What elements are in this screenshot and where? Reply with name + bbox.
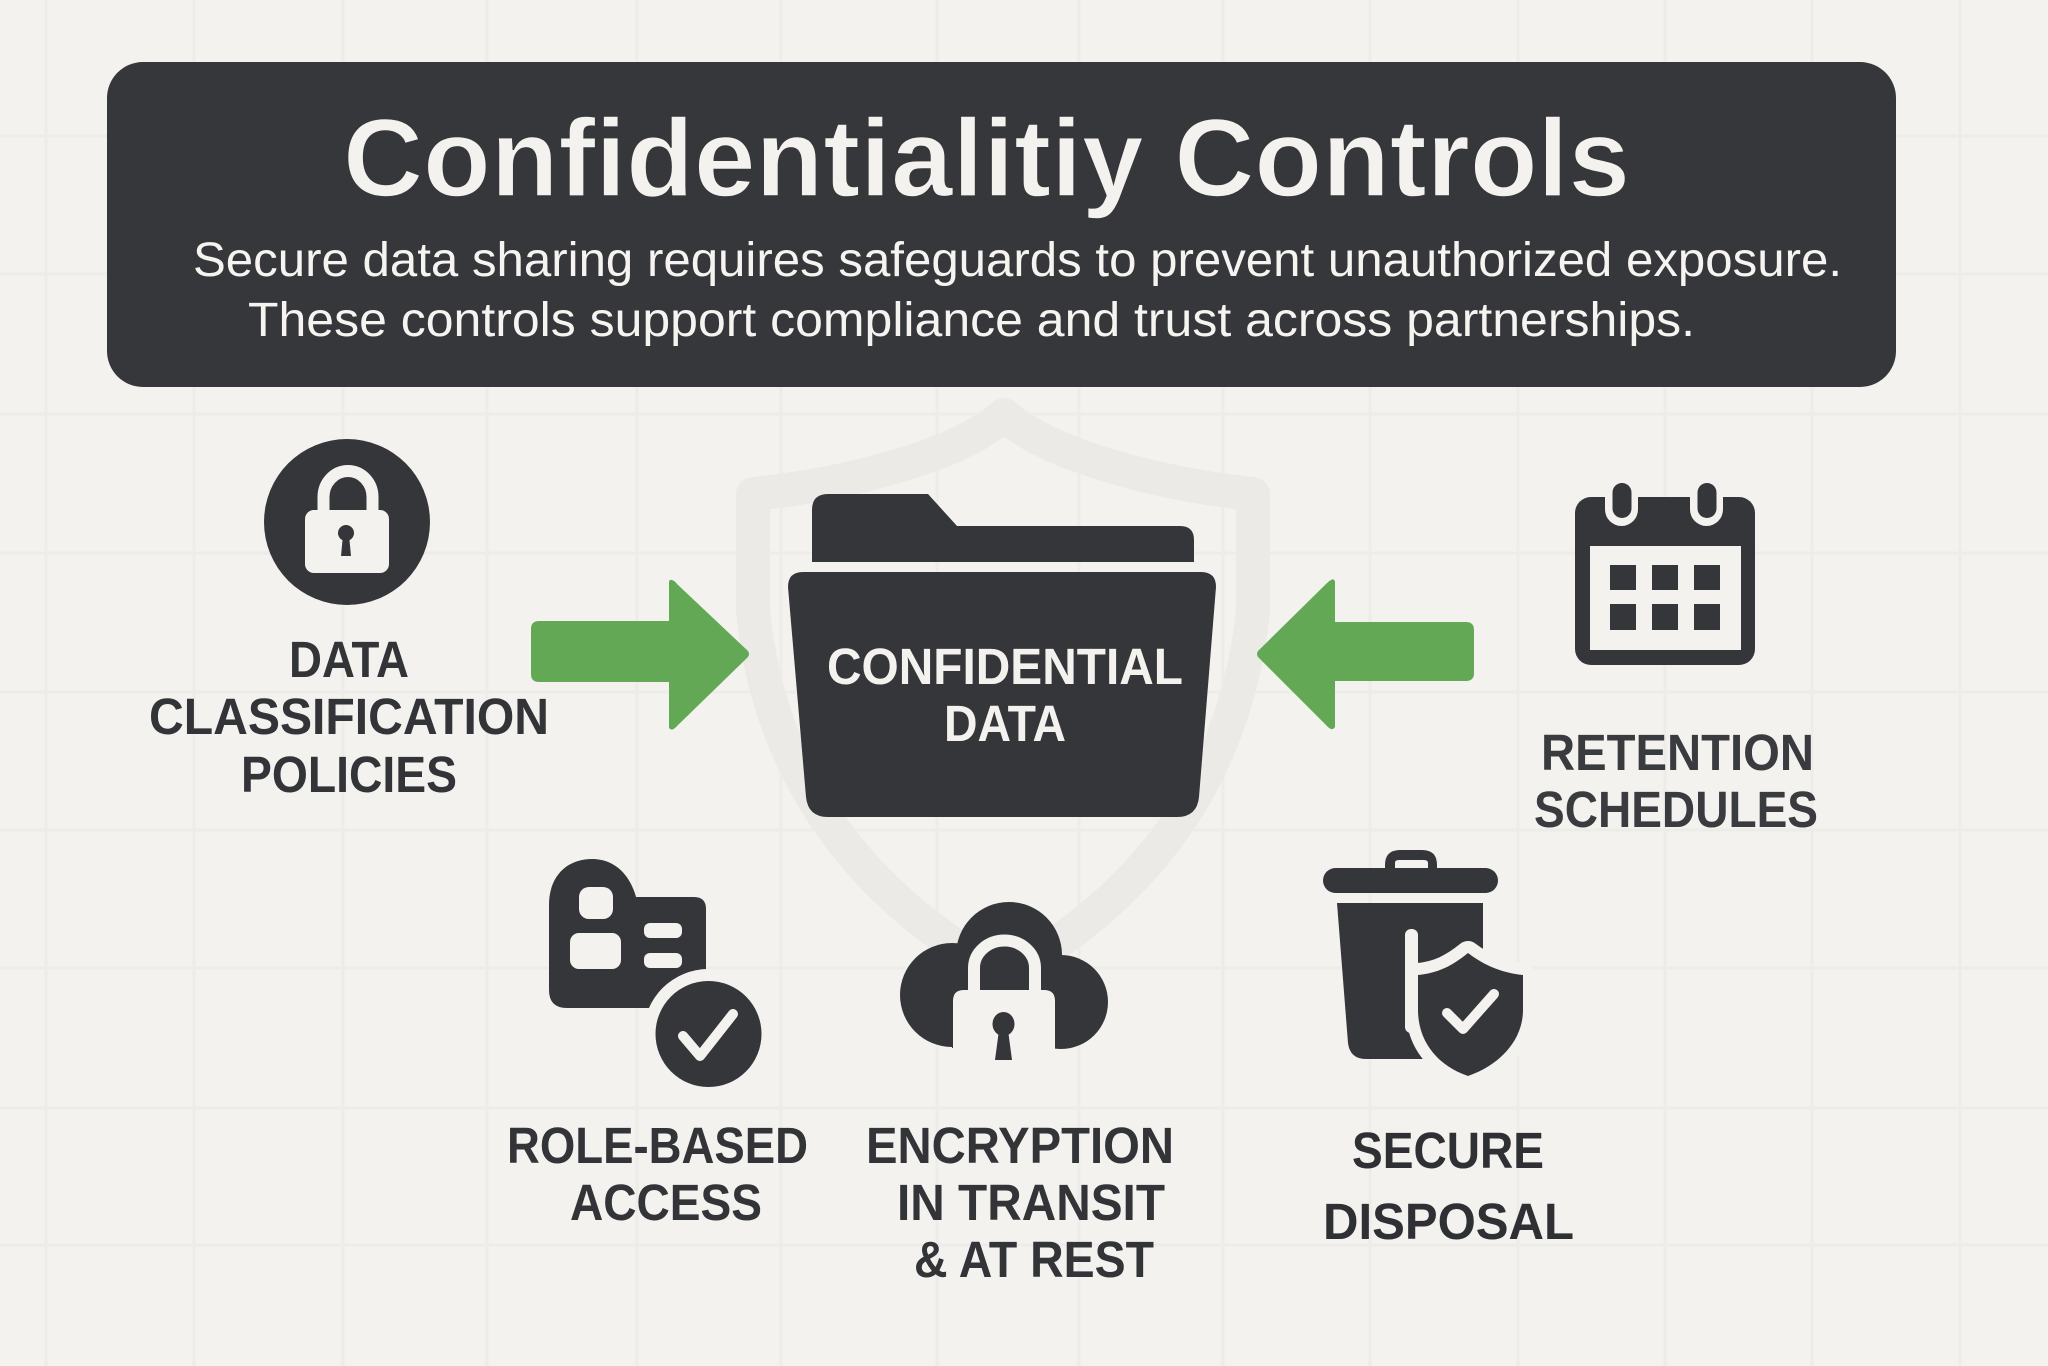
watermark shield (753, 415, 1253, 975)
label: encryption in transit and at rest: ENCRYPTION (866, 1117, 1174, 1174)
label: retention schedules: SCHEDULES (1534, 781, 1818, 838)
label: data classification policies: DATA (289, 631, 409, 688)
arrow: left to folder (531, 580, 749, 730)
icon: confidential data folder (788, 494, 1216, 817)
label: retention schedules (1534, 724, 1818, 838)
label: secure disposal: DISPOSAL (1323, 1193, 1574, 1250)
icon: data classification padlock (264, 439, 430, 605)
icon: cloud with padlock (900, 902, 1108, 1062)
label: role-based access (507, 1117, 808, 1231)
folder label: CONFIDENTIAL (827, 638, 1183, 695)
folder label: DATA (944, 695, 1066, 752)
label: encryption in transit and at rest: IN TRANSIT (897, 1174, 1165, 1231)
label: encryption in transit and at rest: & AT REST (914, 1231, 1154, 1288)
icon: calendar (1575, 480, 1755, 665)
subtitle text: These controls support compliance and trust across partnerships. (248, 294, 1695, 347)
title: Confidentialitiy Controls (343, 97, 1630, 220)
subtitle text: Secure data sharing requires safeguards to prevent unauthorized exposure. (193, 234, 1842, 287)
subtitle text (193, 234, 1842, 347)
label: data classification policies (149, 631, 549, 803)
icon: trash can with shield (1323, 850, 1523, 1076)
label: data classification policies: CLASSIFICATION (149, 688, 549, 745)
label: role-based access: ACCESS (570, 1174, 762, 1231)
label: secure disposal (1323, 1122, 1574, 1250)
label: secure disposal: SECURE (1352, 1122, 1544, 1179)
icon: role-based access card (549, 859, 774, 1099)
label: retention schedules: RETENTION (1541, 724, 1814, 781)
header panel (107, 62, 1896, 387)
label: encryption in transit and at rest (866, 1117, 1174, 1288)
arrow: right to folder (1257, 579, 1474, 729)
label: role-based access: ROLE-BASED (507, 1117, 808, 1174)
label: data classification policies: POLICIES (241, 746, 457, 803)
folder label (827, 638, 1183, 752)
